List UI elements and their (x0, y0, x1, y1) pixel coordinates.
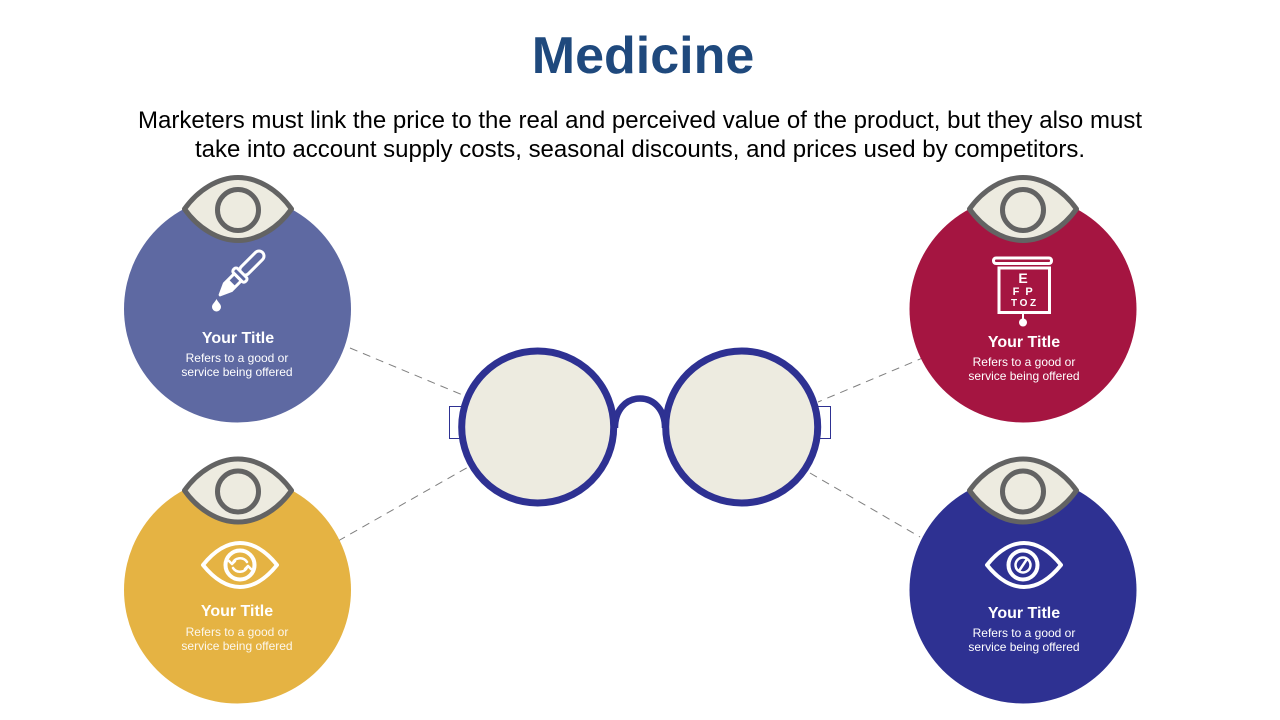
dashed connector: top right (818, 357, 925, 402)
dashed connector: top left (350, 348, 465, 396)
description: Refers to a good or (973, 355, 1075, 369)
icon: eye with refresh (203, 543, 277, 587)
intro text: take into account supply costs, seasonal discounts, and prices used by competitors. (195, 136, 1085, 163)
description: service being offered (968, 640, 1080, 654)
heading: Your Title (201, 603, 273, 620)
icon: eye chart: FP (1013, 286, 1033, 298)
bridge (615, 398, 665, 428)
circle (124, 476, 351, 704)
left lens (462, 351, 614, 503)
eye cap (970, 459, 1076, 522)
icon: eye chart: TOZ (1011, 298, 1036, 309)
description: service being offered (968, 369, 1080, 383)
left temple (450, 406, 470, 438)
panel: bottom right (910, 459, 1136, 704)
circle (910, 476, 1136, 704)
description: Refers to a good or (973, 626, 1075, 640)
circle (910, 196, 1136, 422)
intro text (138, 107, 1142, 163)
description: service being offered (181, 639, 293, 653)
right lens (666, 351, 818, 503)
glasses (450, 351, 830, 503)
icon: eye chart: E (1018, 270, 1028, 286)
description (968, 355, 1080, 383)
dashed connector: bottom right (810, 473, 920, 537)
title: Medicine (532, 27, 754, 85)
dashed connector: bottom left (338, 466, 470, 541)
description (181, 351, 293, 379)
description (181, 625, 293, 653)
description (968, 626, 1080, 654)
icon: dropper (212, 246, 269, 312)
intro text: Marketers must link the price to the real and perceived value of the product, but they also must (138, 107, 1142, 134)
icon: eye with blocked pupil (987, 543, 1061, 587)
panel: top left (124, 178, 351, 422)
eye cap (184, 178, 292, 240)
right temple (810, 406, 830, 438)
description: Refers to a good or (186, 351, 288, 365)
heading: Your Title (988, 334, 1060, 351)
description: service being offered (181, 365, 293, 379)
icon: eye chart (994, 258, 1052, 326)
panel: bottom left (124, 459, 351, 704)
panel: top right (910, 178, 1136, 422)
eye cap (970, 178, 1076, 240)
description: Refers to a good or (186, 625, 288, 639)
heading: Your Title (988, 605, 1060, 622)
eye cap (184, 459, 292, 522)
heading: Your Title (202, 330, 274, 347)
circle (124, 196, 351, 422)
